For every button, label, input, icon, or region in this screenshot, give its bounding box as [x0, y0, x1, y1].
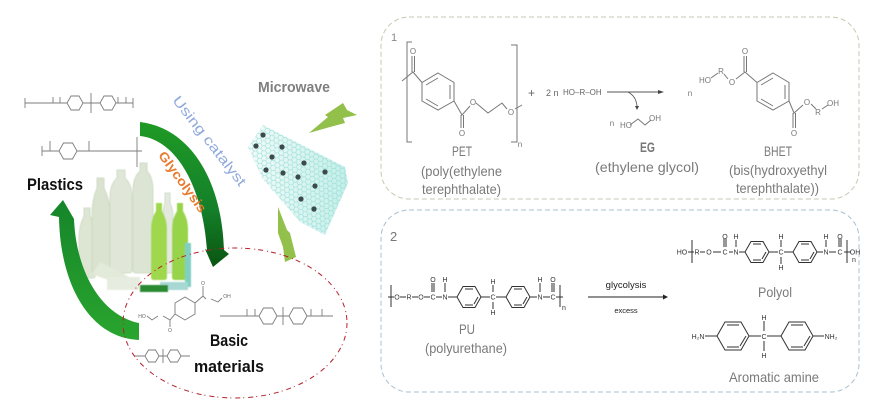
arrow: glycolysis excess [588, 280, 668, 315]
panel: plastics recycling cycle [25, 79, 357, 398]
chemical structure: amine small [135, 349, 190, 363]
chemical structure: Polyol: H [733, 234, 739, 241]
chemical structure: Polyol: C [778, 250, 784, 256]
label: PET [421, 143, 502, 197]
label: EG: EG [640, 139, 655, 155]
chemical structure: PU: H [537, 277, 543, 284]
chemical structure: Polyol: H [823, 234, 829, 241]
label: Microwave: Microwave [258, 79, 330, 96]
panel: PU glycolysis reaction [381, 210, 860, 392]
reagent: 2 n HO-R-OH: + [528, 86, 535, 100]
label: PET: PET [452, 143, 472, 159]
panel border 2 [381, 210, 859, 392]
chemical structure: BHET: HO [699, 76, 711, 85]
chemical structure: PU: C [490, 294, 496, 302]
chemical structure: PU: R [406, 294, 412, 302]
chemical structure: PET [402, 42, 522, 149]
chemical structure: Aromatic amine: H₂N [692, 334, 704, 341]
chemical structure: PU: H [490, 279, 496, 286]
chemical structure: BHET small [138, 281, 231, 334]
label: EG [595, 139, 699, 175]
label: PET: terephthalate) [422, 181, 501, 197]
chemical structure: Aromatic amine: H [761, 315, 767, 322]
chemical structure: top polymer [25, 93, 133, 113]
arrow: return arrow to plastics [50, 200, 139, 340]
chemical structure: Polyol: O [837, 234, 843, 241]
chemical structure: Aromatic amine [692, 315, 838, 360]
label: BHET: terephthalate)) [736, 180, 819, 196]
chemical structure: Aromatic amine: NH₂ [825, 334, 838, 341]
chemical structure: Polyol: HO [677, 250, 688, 256]
label: Plastics: Plastics [27, 175, 83, 194]
chemical structure: Polyol: C [837, 250, 843, 256]
chemical structure: PET: O [508, 108, 514, 117]
label: Using catalyst: Using catalyst [169, 92, 250, 189]
label: BHET: (bis(hydroxyethyl [729, 162, 827, 178]
chemical structure: Aromatic amine: C [761, 334, 767, 341]
chemical structure: EG: n [610, 119, 614, 128]
chemical structure: BHET: O [742, 47, 748, 56]
label: Polyol: Polyol [758, 284, 792, 300]
chemical structure: PET: n [518, 140, 522, 149]
chemical structure: PU: n [562, 305, 566, 312]
chemical structure: BHET: O [804, 98, 810, 107]
chemical structure: BHET: R [815, 108, 821, 117]
panel number 2: 2 [390, 229, 397, 244]
chemical structure: PET: O [470, 98, 476, 107]
text: n coefficient: n [688, 89, 692, 98]
chemical structure: EG: OH [649, 114, 661, 123]
chemical structure: Polyol: OH [850, 250, 860, 256]
reagent: 2 n HO-R-OH: 2 n [546, 88, 559, 98]
chemical structure: PU [388, 277, 566, 317]
chemical structure: polyol small [220, 307, 333, 325]
chemical structure: Polyol: H [778, 265, 784, 272]
chemical structure: Polyol: n [852, 257, 856, 264]
arrow: glycolysis excess: excess [614, 306, 638, 315]
reagent: 2 n HO-R-OH [528, 86, 602, 100]
chemical structure: Polyol: O [722, 234, 728, 241]
chemical structure: PET: O [459, 129, 465, 138]
label: PET: (poly(ethylene [421, 163, 502, 179]
chemical structure: Polyol: N [733, 250, 739, 256]
chemical structure: PU: O [430, 277, 436, 284]
chemical structure: PU: C [430, 294, 436, 302]
label: Basic materials [194, 331, 264, 376]
panel: PET glycolysis reaction [381, 17, 859, 199]
chemical structure: BHET small: O [201, 281, 205, 287]
chemical structure: PU: O [550, 277, 556, 284]
chemical structure: Aromatic amine: H [761, 353, 767, 360]
chemical structure: BHET small: HO [138, 314, 146, 320]
chemical structure: BHET: OH [827, 99, 839, 108]
chemical structure: Polyol: H [778, 234, 784, 241]
chemical structure: PU: N [537, 294, 543, 302]
icon: catalyst nanotube [248, 125, 348, 235]
chemical structure: EG: HO [620, 121, 632, 130]
label: BHET [729, 143, 827, 196]
chemical structure: BHET: O [729, 78, 735, 87]
chemical structure: PU: H [442, 277, 448, 284]
arrow: glycolysis arrow [140, 122, 229, 267]
chemical structure: second polymer [42, 137, 142, 167]
chemical structure: BHET small: O [168, 328, 172, 334]
chemical structure: Polyol [677, 234, 860, 272]
icon: lightning bolt top [309, 103, 357, 133]
label: Aromatic amine: Aromatic amine [729, 369, 819, 385]
chemical structure: Polyol: C [722, 250, 728, 256]
chemical structure: PU: O [394, 294, 400, 302]
label: Basic materials: materials [194, 357, 264, 376]
icon: lightning bolt bottom [278, 207, 296, 262]
label: PU: (polyurethane) [425, 340, 507, 356]
label: BHET: BHET [764, 143, 792, 159]
chemical structure: BHET: O [791, 129, 797, 138]
label: EG: (ethylene glycol) [595, 159, 699, 175]
chemical structure: Polyol: R [694, 250, 700, 256]
label: Basic materials: Basic [210, 331, 248, 350]
icon: plastic bottles [79, 163, 191, 292]
chemical structure: BHET [699, 47, 839, 138]
arrow: reaction with EG release [607, 90, 664, 110]
chemical structure: EG [610, 114, 661, 130]
dashed ellipse: basic materials [123, 248, 347, 398]
chemical structure: PU: C [550, 294, 556, 302]
chemical structure: PU: H [490, 310, 496, 317]
chemical structure: PET: O [410, 47, 416, 56]
chemical structure: BHET: R [718, 67, 724, 76]
chemical structure: PU: O [418, 294, 424, 302]
chemical structure: Polyol: N [823, 250, 829, 256]
chemical structure: BHET small: OH [223, 294, 231, 300]
label: PU [425, 321, 507, 356]
reagent: 2 n HO-R-OH: HO–R–OH [563, 88, 602, 97]
panel number 1: 1 [391, 32, 397, 44]
arrow: glycolysis excess: glycolysis [606, 280, 647, 291]
label: PU: PU [459, 321, 475, 337]
panel border 1 [381, 17, 859, 199]
chemical structure: PU: N [442, 294, 448, 302]
chemical structure: Polyol: O [706, 250, 712, 256]
label: Glycolysis: Glycolysis [155, 148, 210, 215]
